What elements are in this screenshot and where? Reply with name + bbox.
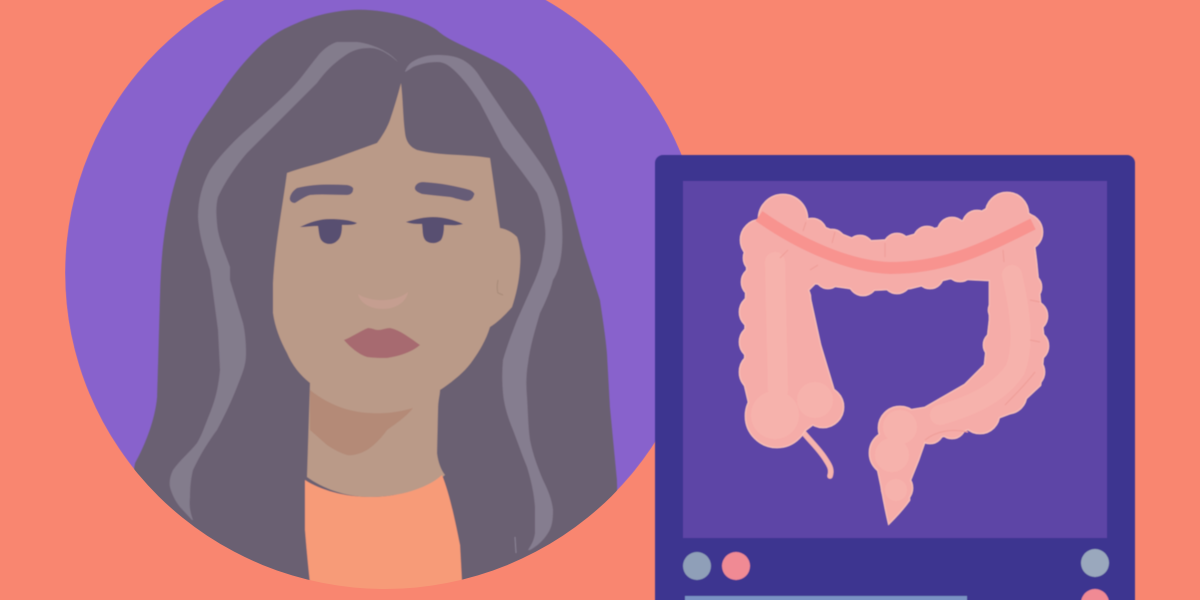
left eyebrow [290,184,353,203]
neck shadow [310,390,413,455]
monitor [655,155,1135,600]
colon central band [759,216,1033,268]
lips [344,328,420,358]
appendix [803,432,831,476]
hair [110,10,620,600]
button pink left [722,552,750,580]
monitor screen [683,181,1107,538]
hair strand [515,537,516,553]
button grey left [683,552,711,580]
hair highlight left [170,42,398,520]
ear detail [497,280,503,295]
colon lighter highlights [751,262,1021,501]
monitor body [655,155,1135,600]
portrait: woman in purple circle [65,0,705,600]
colon [740,193,1048,523]
left eye [300,219,357,244]
face and neck [273,83,520,497]
shirt [305,475,463,600]
colon silhouette [740,193,1048,523]
right eye [406,217,463,243]
hair highlight right [405,55,562,550]
monitor bar [685,596,967,600]
colon outline [740,193,1048,523]
right eyebrow [415,182,474,201]
purple circle [65,0,682,490]
button pink right [1081,589,1109,600]
nose [359,294,407,308]
colon folds [780,222,1040,440]
button grey right [1081,549,1109,577]
